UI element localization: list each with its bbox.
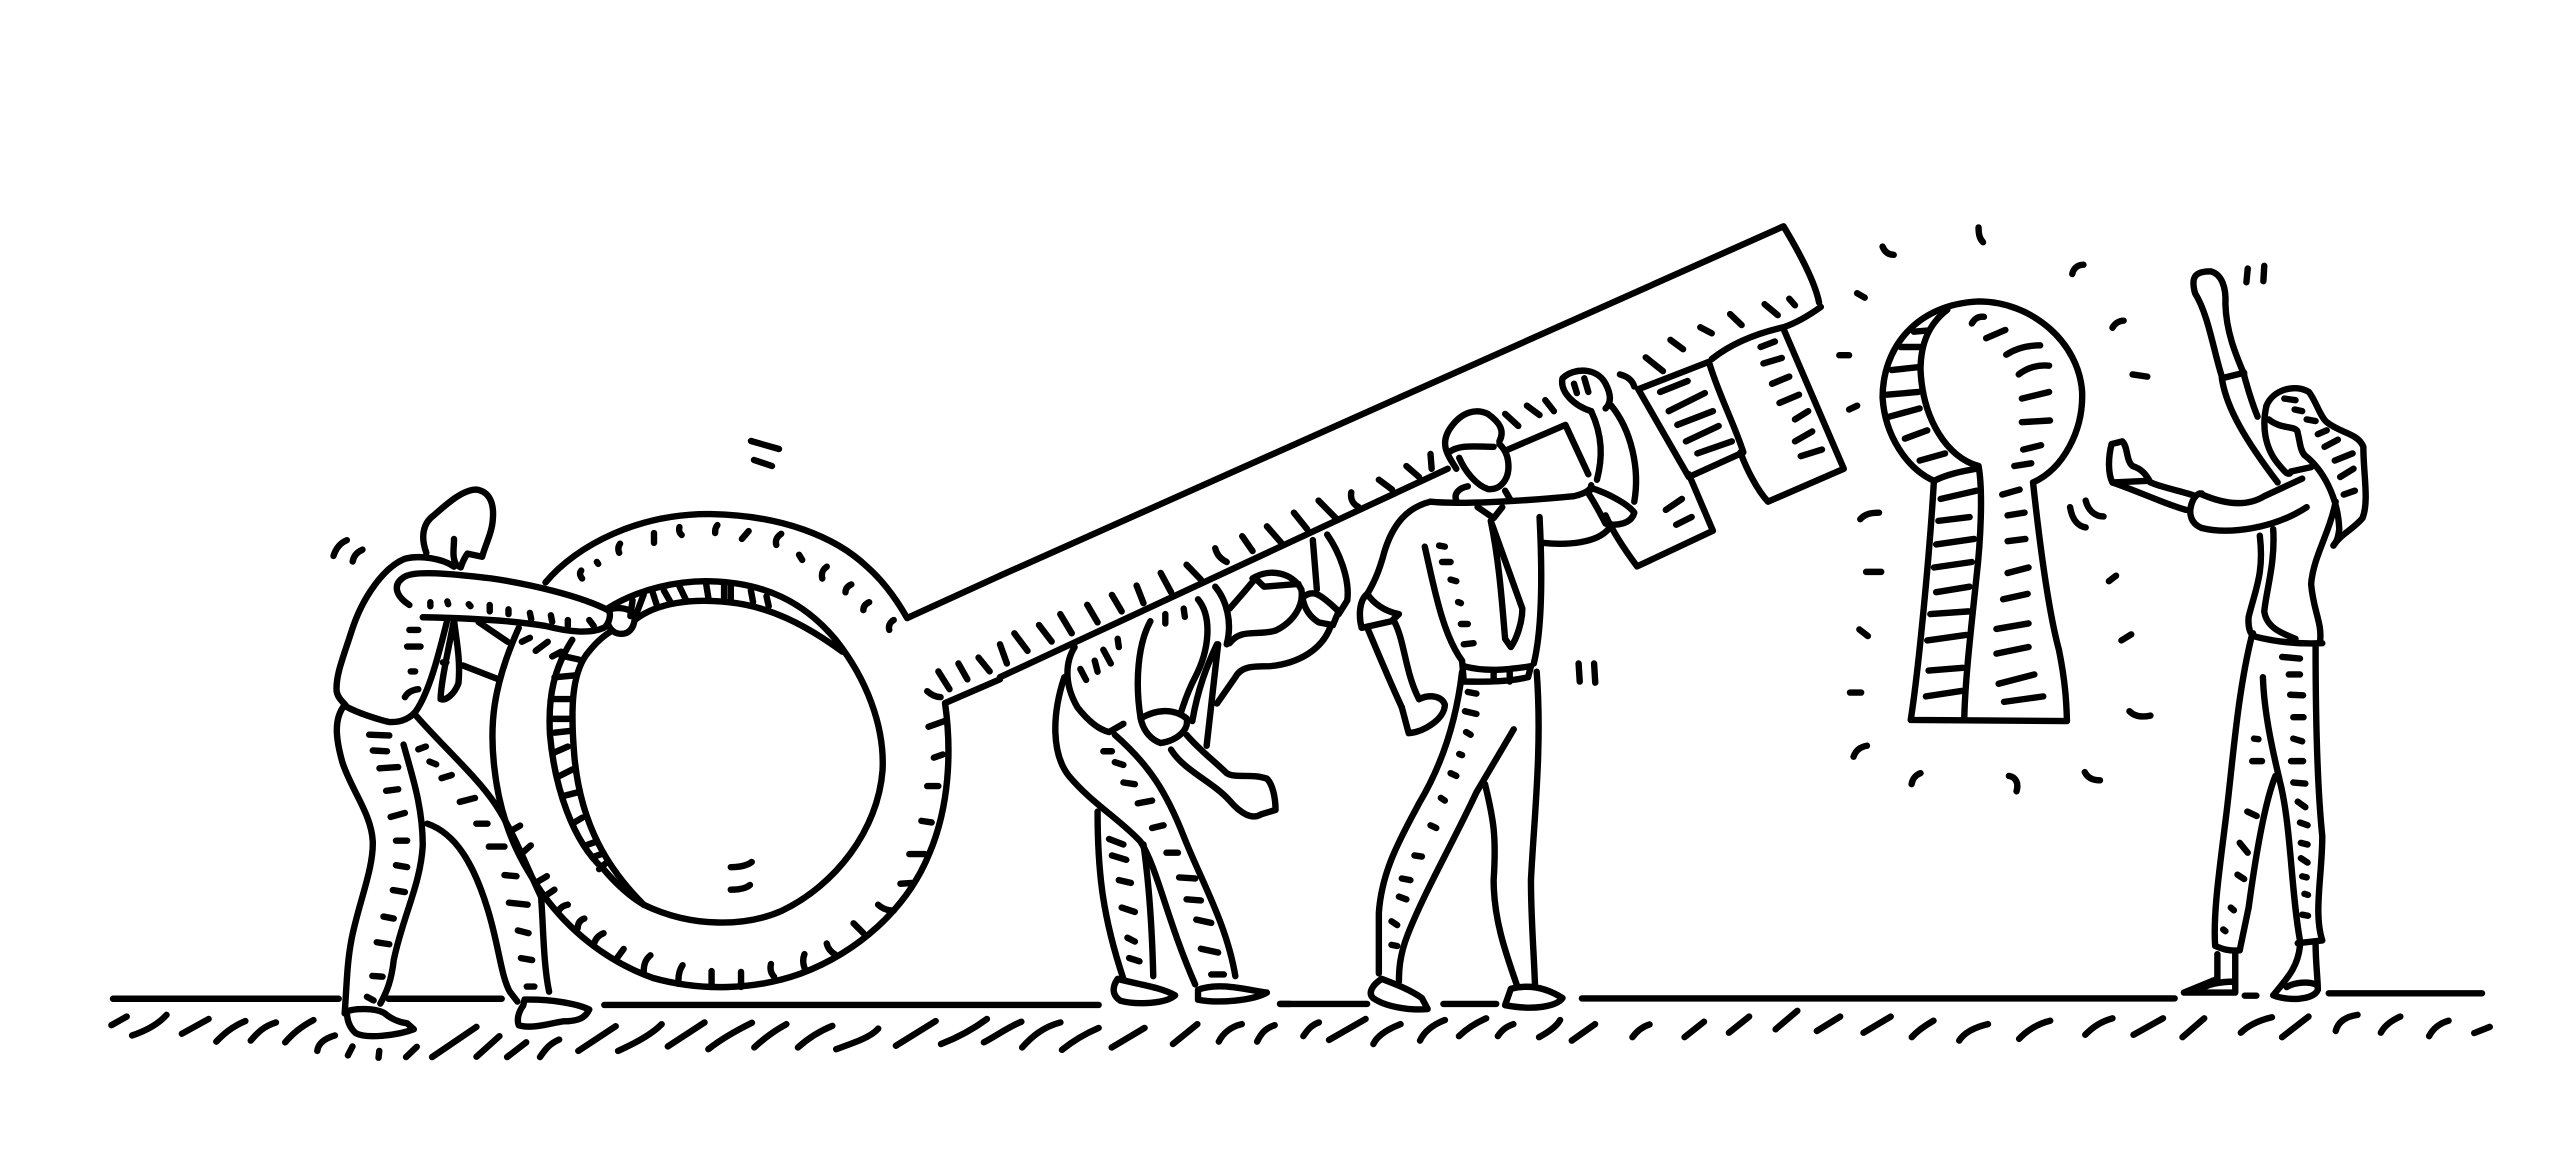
ground left section [111,999,1290,1058]
motion mark above ring [751,441,779,466]
ground right section [1280,993,2490,1044]
key shaft [1000,226,1821,677]
keyhole shine marks [1839,227,2264,791]
key shaft, documents and two workers [1000,226,1844,1009]
documents hanging from the key [1606,329,1844,566]
key ring [492,514,1000,987]
key bow and left worker [333,490,1000,1036]
woman reaching toward the keyhole [2109,271,2366,999]
bent-over worker [1055,535,1348,1003]
worker pushing the ring [333,490,635,1036]
standing worker with tie [1360,371,1636,1009]
keyhole and woman [1839,227,2366,999]
keyhole [1883,301,2082,721]
